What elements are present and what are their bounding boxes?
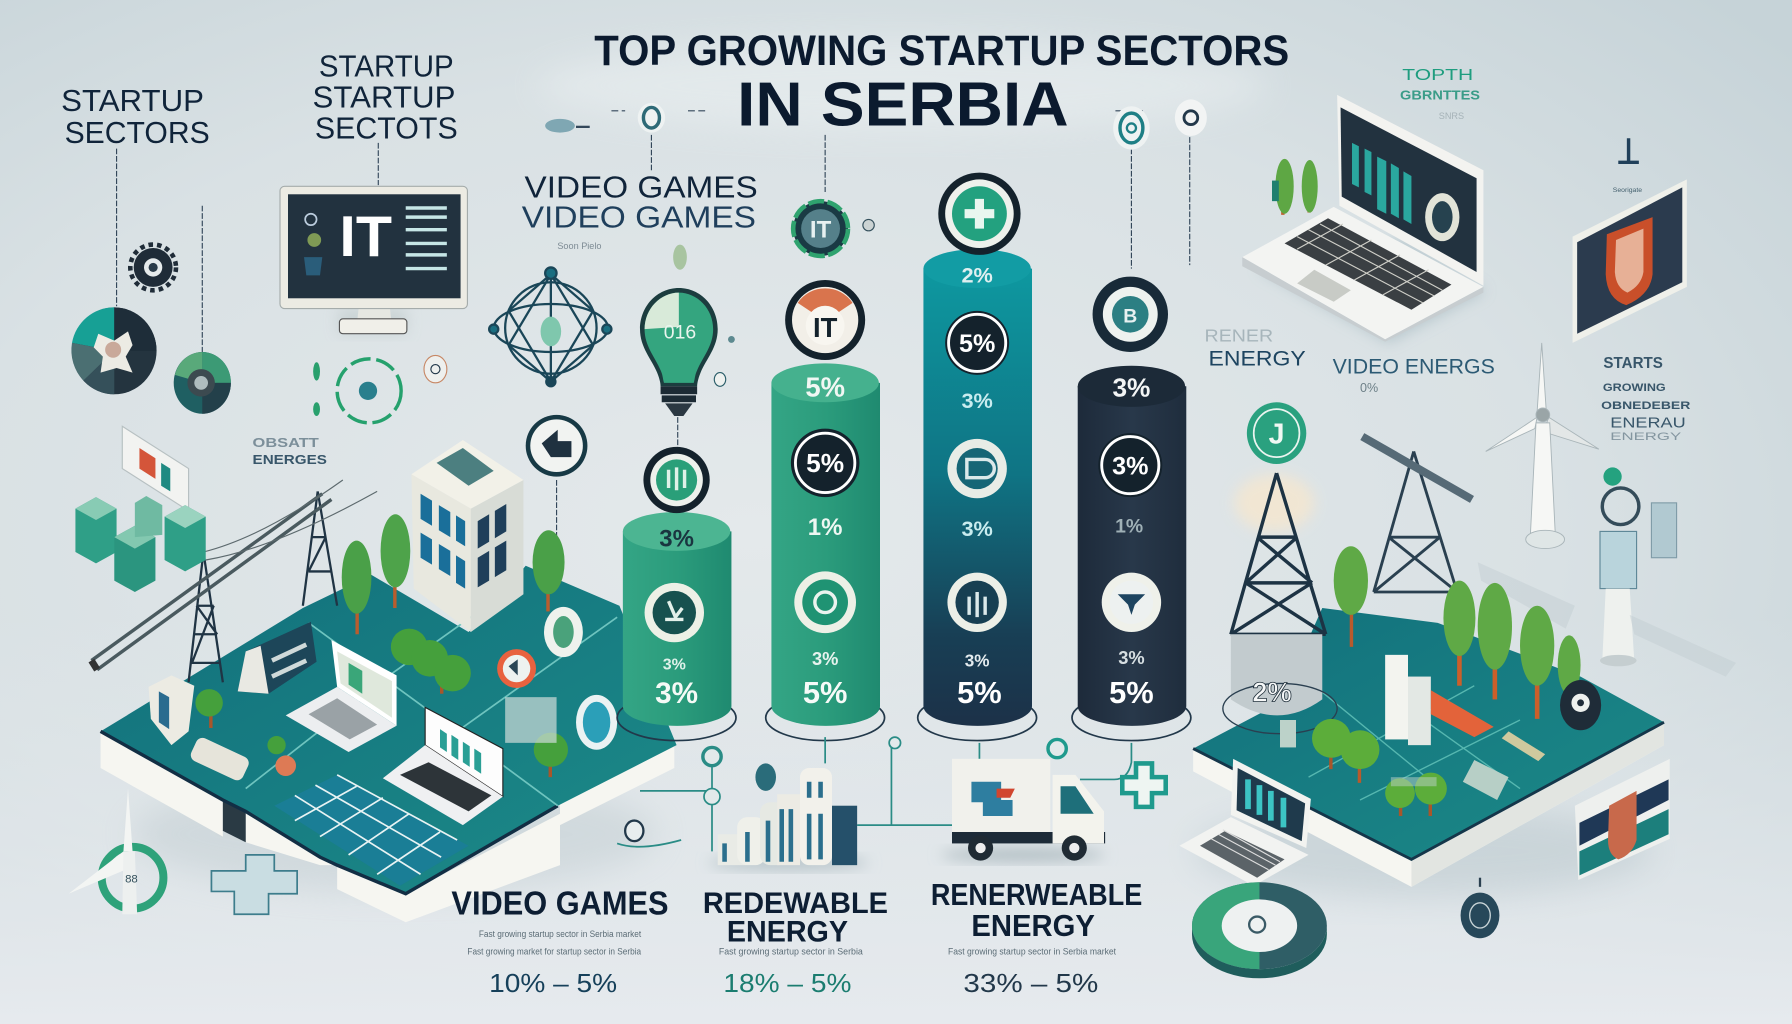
icon: video game badge bbox=[793, 201, 848, 256]
text block: video games: Fast growing startup sector in Serbia market bbox=[479, 929, 642, 939]
chart: cylinder 3 teal: 3% bbox=[965, 650, 990, 670]
text block: redewable energy bbox=[703, 887, 888, 998]
chart: cylinder 1 green bbox=[617, 447, 736, 741]
text block: renerweable energy: RENERWEABLE bbox=[931, 877, 1142, 912]
circular badges on platform bbox=[189, 607, 617, 783]
ring 5%: 5% bbox=[959, 330, 995, 358]
icon: lightbulb: 016 bbox=[664, 321, 696, 343]
chart: cylinder 4 dark: 1% bbox=[1115, 516, 1143, 538]
building bbox=[411, 440, 523, 632]
white bars bbox=[1385, 655, 1494, 745]
ring 5% bbox=[945, 311, 1009, 375]
tall trees bbox=[1334, 546, 1581, 719]
label: energy texts right: RENER bbox=[1205, 326, 1273, 346]
label: energies: OBSATT bbox=[253, 436, 319, 450]
ring icon bbox=[645, 583, 704, 642]
label: starts group right bbox=[1601, 355, 1690, 443]
small arch building bbox=[238, 622, 317, 694]
glow bbox=[1234, 474, 1314, 531]
heading: video games: Soon Pielo bbox=[557, 241, 601, 251]
laptop two on platform bbox=[383, 707, 503, 825]
heading: startup startup sectots: STARTUP bbox=[313, 79, 455, 114]
icon: left wind turbine ring bbox=[69, 789, 163, 914]
text block: video games: VIDEO GAMES bbox=[451, 885, 669, 922]
icon: plus cross bbox=[1120, 761, 1168, 809]
text block: renerweable energy bbox=[931, 877, 1142, 998]
platform top bbox=[1193, 608, 1664, 859]
label: top green text bbox=[1400, 67, 1480, 121]
label: starts group right: OBNEDEBER bbox=[1601, 400, 1690, 412]
icon: small top badges bbox=[545, 99, 1207, 150]
chart: cylinder 4 dark bbox=[1072, 277, 1191, 741]
label: starts group right: STARTS bbox=[1603, 355, 1663, 372]
pattern: dotted patches bbox=[1478, 562, 1736, 677]
small tower block bbox=[149, 675, 194, 745]
heading: video games bbox=[522, 170, 758, 251]
heading: startup sectors left bbox=[61, 83, 210, 150]
icon: computer monitor with IT: IT bbox=[339, 205, 392, 269]
chart: cylinder 2 green: 3% bbox=[812, 648, 838, 669]
ring icon bbox=[794, 571, 856, 633]
icon: trees beside laptop bbox=[1272, 159, 1318, 215]
tower and crane bbox=[91, 480, 377, 682]
platform top bbox=[101, 566, 677, 894]
title: IN SERBIA bbox=[737, 71, 1069, 140]
chart: cylinder 4 dark: 5% bbox=[1109, 675, 1154, 710]
icon: small laptop bottom right bbox=[1179, 759, 1311, 886]
text block: redewable energy: ENERGY bbox=[727, 916, 848, 949]
icon: left wind turbine ring: 88 bbox=[125, 873, 138, 885]
label: top green text: SNRS bbox=[1439, 111, 1464, 121]
ring 3%: 3% bbox=[1112, 452, 1148, 480]
label: energy texts right: 0% bbox=[1360, 381, 1378, 395]
icon: lightbulb bbox=[640, 288, 718, 416]
text block: renerweable energy: ENERGY bbox=[971, 908, 1095, 943]
icon: network globe bbox=[489, 267, 611, 386]
text block: renerweable energy: Fast growing startup sector in Serbia market bbox=[948, 946, 1116, 956]
icon: city buildings bbox=[709, 763, 869, 870]
panel: left isometric platform bbox=[91, 440, 677, 922]
icon: serbia flag card bbox=[1575, 759, 1670, 880]
top badge IT: IT bbox=[813, 312, 838, 343]
ring 5%: 5% bbox=[806, 448, 844, 478]
heading: video games: VIDEO GAMES bbox=[522, 199, 756, 234]
laptop one on platform bbox=[286, 640, 397, 752]
icon: green J badge bbox=[1247, 402, 1306, 464]
chart: cylinder 3 teal bbox=[918, 173, 1037, 741]
icon: puzzle pieces bbox=[211, 855, 297, 914]
small details on platform bbox=[1280, 720, 1545, 800]
icon: tablet with shield bbox=[1573, 138, 1687, 343]
icon: left blocks and card bbox=[75, 426, 206, 592]
round trees bbox=[195, 629, 568, 777]
top badge plus bbox=[938, 173, 1021, 255]
icon: chart badge bbox=[526, 415, 587, 477]
label: energy texts right bbox=[1205, 326, 1495, 395]
ring icon bbox=[947, 573, 1007, 632]
label: starts group right: GROWING bbox=[1603, 382, 1666, 394]
icon: computer monitor with IT bbox=[280, 186, 467, 334]
text block: video games bbox=[451, 885, 669, 998]
chart: cylinder 2 green: 5% bbox=[805, 372, 845, 403]
text block: redewable energy: 18% – 5% bbox=[723, 968, 851, 998]
large pylon bbox=[1231, 473, 1326, 634]
icon: small dark badge bbox=[1461, 878, 1499, 938]
label: energies bbox=[253, 436, 327, 467]
heading: startup sectors left: STARTUP bbox=[61, 83, 204, 118]
icon: donut chart bbox=[1192, 882, 1327, 978]
icon: video game badge: IT bbox=[810, 217, 832, 244]
platform sides bbox=[1193, 722, 1664, 887]
chart: cylinder 3 teal: 3% bbox=[961, 516, 993, 541]
text block: redewable energy: REDEWABLE bbox=[703, 887, 888, 920]
gray base with percent bbox=[1223, 634, 1337, 734]
icon: pie wheel small bbox=[174, 352, 231, 414]
heading: video games: VIDEO GAMES bbox=[525, 170, 758, 205]
chart: cylinder 2 green bbox=[766, 280, 885, 741]
text block: video games: 10% – 5% bbox=[489, 968, 617, 998]
top badge IT bbox=[785, 280, 865, 360]
heading: startup startup sectots: STARTUP bbox=[319, 49, 454, 84]
icon: pie wheel large bbox=[71, 307, 157, 394]
platform sides bbox=[101, 731, 674, 922]
round trees bbox=[1312, 719, 1447, 816]
icon: right devices bbox=[1600, 467, 1677, 666]
chart: cylinder 3 teal: 3% bbox=[961, 388, 993, 413]
chart: cylinder 3 teal: 5% bbox=[957, 675, 1002, 710]
title bbox=[537, 27, 1289, 140]
label: top green text: TOPTH bbox=[1402, 67, 1473, 84]
top badge bbox=[643, 447, 710, 513]
chart: cylinder 1 green: 3% bbox=[659, 525, 694, 552]
icon: green orbit ring bbox=[313, 355, 447, 423]
connector lines bbox=[117, 111, 1190, 537]
chart: cylinder 2 green: 5% bbox=[803, 675, 847, 710]
chart: cylinder 4 dark: 3% bbox=[1118, 647, 1145, 668]
ring 3% bbox=[1098, 433, 1162, 497]
chart: cylinder 4 dark: 3% bbox=[1112, 373, 1150, 403]
title: TOP GROWING STARTUP SECTORS bbox=[594, 27, 1289, 74]
icon: tablet with shield: Seorigate bbox=[1613, 187, 1642, 194]
ring icon bbox=[1102, 573, 1161, 632]
panel: right isometric platform bbox=[1193, 437, 1664, 897]
text block: video games: Fast growing market for startup sector in Serbia bbox=[467, 946, 642, 956]
chart: cylinder 1 green: 3% bbox=[655, 677, 698, 710]
chart: cylinder 3 teal: 2% bbox=[961, 262, 993, 287]
label: top green text: GBRNTTES bbox=[1400, 88, 1480, 102]
tall trees bbox=[342, 514, 565, 634]
heading: startup startup sectots bbox=[313, 49, 458, 145]
top badge: B bbox=[1123, 305, 1137, 327]
chart: cylinder 2 green: 1% bbox=[808, 514, 842, 541]
label: energy texts right: VIDEO ENERGS bbox=[1333, 354, 1495, 379]
solar grid bbox=[274, 775, 469, 886]
top badge bbox=[1093, 277, 1168, 352]
icon: gear bbox=[130, 245, 176, 290]
heading: startup sectors left: SECTORS bbox=[65, 115, 210, 150]
icon: delivery truck bbox=[941, 759, 1105, 862]
icon: wind turbine right bbox=[1486, 343, 1599, 549]
ring icon bbox=[947, 439, 1007, 498]
text block: redewable energy: Fast growing startup sector in Serbia bbox=[719, 946, 864, 956]
label: starts group right: ENERGY bbox=[1610, 431, 1682, 443]
misc small dots bbox=[673, 219, 874, 386]
icon: green J badge: J bbox=[1269, 418, 1285, 450]
label: energy texts right: ENERGY bbox=[1209, 346, 1306, 371]
gray base with percent: 2% bbox=[1252, 677, 1292, 708]
second pylon bbox=[1362, 437, 1472, 592]
icon: top-right laptop bbox=[1242, 95, 1486, 343]
text block: renerweable energy: 33% – 5% bbox=[963, 968, 1098, 998]
chart: cylinder 1 green: 3% bbox=[663, 657, 686, 674]
label: starts group right: ENERAU bbox=[1610, 415, 1686, 431]
label: energies: ENERGES bbox=[253, 453, 327, 467]
camera badge bbox=[1560, 680, 1601, 730]
connectors: cylinders to bottom icons bbox=[617, 737, 1131, 851]
heading: startup startup sectots: SECTOTS bbox=[315, 110, 458, 145]
ring 5% bbox=[791, 429, 859, 497]
